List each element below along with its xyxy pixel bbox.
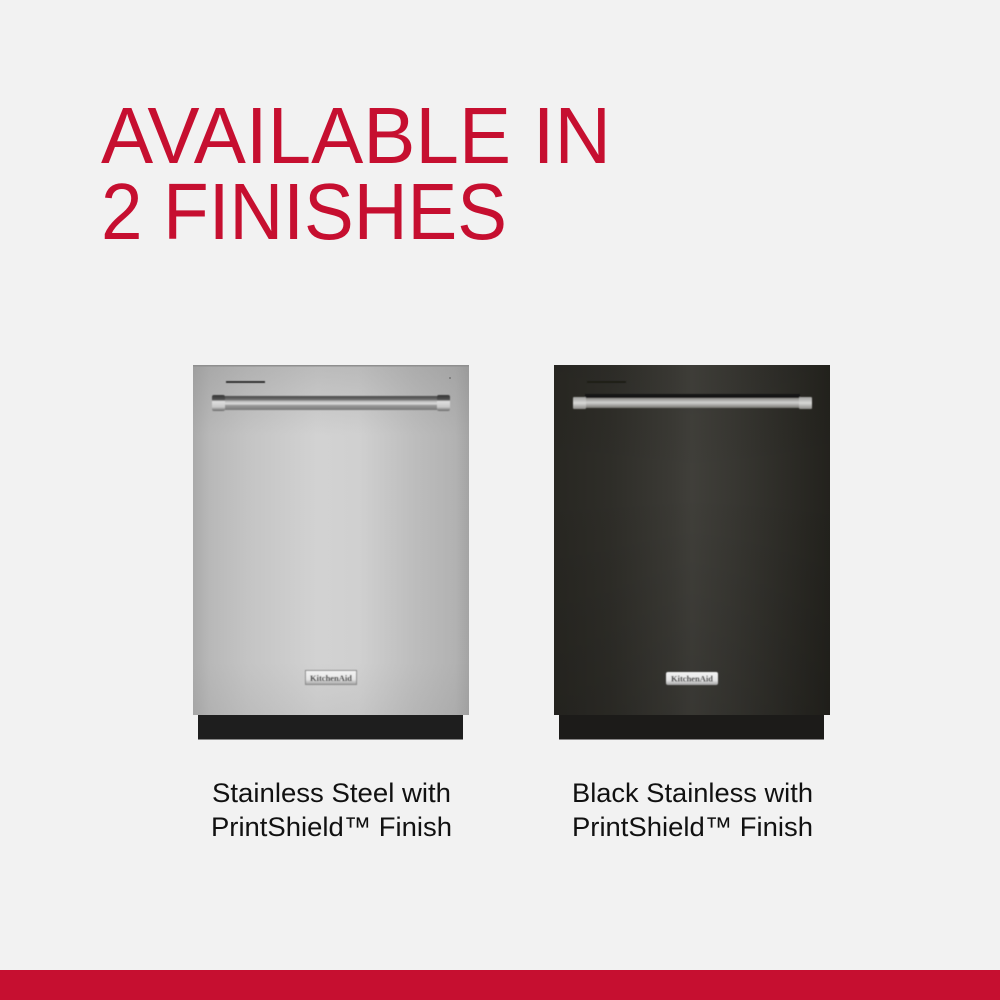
indicator light xyxy=(449,377,451,379)
door panel xyxy=(193,365,469,715)
caption: stainless steel: Stainless Steel with xyxy=(212,778,451,808)
control strip xyxy=(587,381,626,383)
caption: black stainless: PrintShield™ Finish xyxy=(572,812,813,842)
title xyxy=(101,91,611,256)
caption: stainless steel xyxy=(211,778,452,842)
door handle xyxy=(573,394,812,409)
door panel xyxy=(554,365,830,715)
toe kick xyxy=(198,715,463,740)
title: AVAILABLE IN xyxy=(101,91,611,180)
caption: stainless steel: PrintShield™ Finish xyxy=(211,812,452,842)
door handle xyxy=(212,395,450,411)
toe kick xyxy=(559,715,824,740)
brand badge xyxy=(306,670,356,684)
caption: black stainless: Black Stainless with xyxy=(572,778,813,808)
brand badge: KitchenAid xyxy=(671,674,714,684)
brand badge xyxy=(666,672,718,685)
bottom red band xyxy=(0,970,1000,1000)
dishwasher: stainless steel xyxy=(193,365,469,740)
caption: black stainless xyxy=(572,778,813,842)
brand badge: KitchenAid xyxy=(310,674,353,683)
title: 2 FINISHES xyxy=(101,167,507,256)
control strip xyxy=(226,381,265,383)
dishwasher: black stainless xyxy=(554,365,830,740)
